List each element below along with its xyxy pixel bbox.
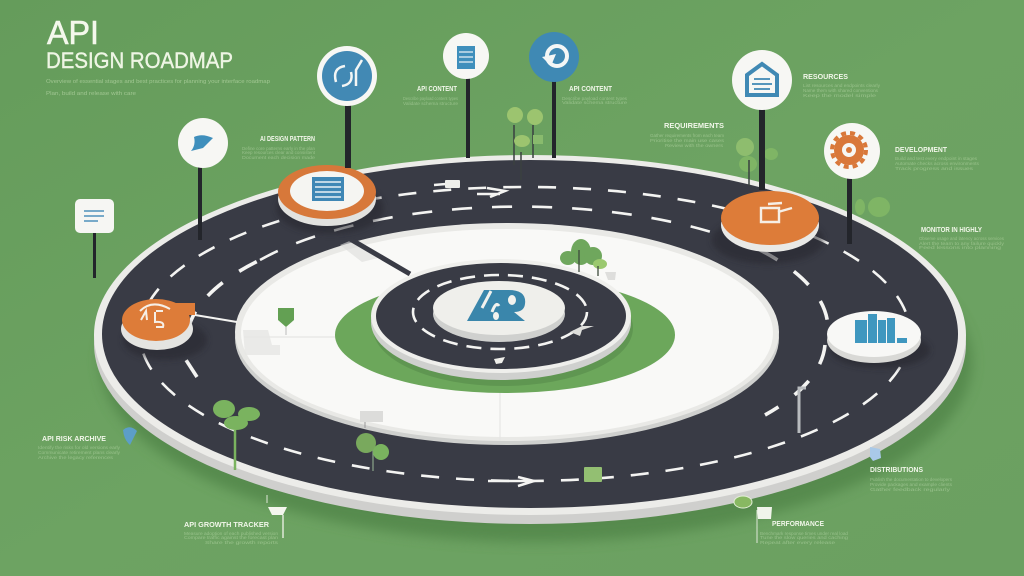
- label: design pattern: AI DESIGN PATTERN: [260, 136, 315, 143]
- label: bottom right: DISTRIBUTIONS: [870, 467, 923, 474]
- subtitle text: Plan, build and release with care: [46, 91, 136, 97]
- icon: hub road arrow: [570, 326, 594, 336]
- icon: city buildings: [855, 314, 907, 343]
- icon: dollar arrow: [140, 304, 170, 327]
- pin: target: [317, 46, 377, 168]
- label: api content left: [403, 86, 459, 106]
- inner lane markings: [186, 207, 828, 415]
- pin: calendar: [443, 33, 489, 158]
- label: bottom left: Identify the risks for old versions early: [38, 445, 121, 450]
- trees: top: [507, 107, 543, 180]
- trees: upper right: [736, 138, 778, 186]
- label: bottom centre left: Measure adoption of each published version: [184, 531, 279, 536]
- label: requirements: Prioritise the main use cases: [650, 138, 725, 143]
- connector road: [340, 236, 410, 274]
- ground marker: green oval: [734, 496, 752, 508]
- label: api content right: API CONTENT: [569, 86, 613, 93]
- label: bottom centre left: Share the growth reports: [205, 540, 279, 545]
- title: [46, 14, 233, 73]
- label: api content left: Describe payload content types: [403, 96, 459, 101]
- pin: house: [732, 50, 792, 190]
- sign: ring bottom: [360, 411, 383, 428]
- trees: right: [855, 197, 890, 217]
- subtitle text: [46, 79, 270, 97]
- label: design pattern: Define core patterns early in the plan: [242, 146, 315, 151]
- icon: orange box: [761, 203, 792, 222]
- pin: chat: [178, 118, 228, 240]
- platform: top right: [712, 191, 824, 264]
- label: requirements: Review with the owners: [665, 143, 724, 148]
- road arrow top: [434, 184, 505, 197]
- platform: left: [121, 299, 207, 360]
- tree: ring left: [278, 308, 294, 335]
- label: development: Track progress and issues: [895, 166, 974, 171]
- label: bottom centre right: Repeat after every release: [760, 540, 836, 545]
- label: bottom centre right: Tune the slow queries and caching: [760, 535, 849, 540]
- label: bottom right: Publish the documentation to developers: [870, 477, 953, 482]
- label: monitoring: Feed lessons into planning: [919, 245, 1002, 250]
- ground marker: white flag right: [757, 507, 772, 543]
- tree: road bottom: [356, 433, 389, 471]
- API logo: [467, 290, 525, 321]
- pin: refresh: [529, 32, 579, 158]
- label: resources: [803, 74, 881, 98]
- label: bottom centre left: Compare traffic against the forecast plan: [184, 535, 279, 540]
- label: monitoring: Observe usage and latency across services: [919, 236, 1005, 241]
- ground marker: blue left: [123, 427, 137, 445]
- tree: ring top: [560, 239, 616, 280]
- label: requirements: REQUIREMENTS: [664, 123, 724, 130]
- label: resources: Name them with shared conventions: [803, 88, 879, 93]
- pin: note: [75, 199, 114, 278]
- label: bottom centre right: Benchmark response times under real load: [760, 531, 849, 536]
- label: monitoring: Alert the team to any failure quickly: [919, 241, 1005, 246]
- label: development: Build and test every endpoint in stages: [895, 156, 978, 161]
- central hub: [371, 259, 633, 386]
- label: bottom centre right: PERFORMANCE: [772, 521, 824, 528]
- label: development: DEVELOPMENT: [895, 147, 948, 154]
- pin: gear: [824, 123, 880, 244]
- label: bottom right: [870, 467, 953, 492]
- green island: [335, 277, 675, 393]
- label: design pattern: [242, 136, 316, 160]
- label: api content right: Validate schema structure: [562, 100, 628, 105]
- ground marker: white flag left: [267, 495, 287, 538]
- icon: hub pin: [494, 357, 505, 364]
- label: bottom centre right: [760, 521, 849, 545]
- road arrow bottom: [488, 477, 534, 486]
- title: API: [47, 14, 99, 51]
- outer lane markings: [140, 187, 910, 481]
- platform: right: [827, 311, 930, 368]
- road sign top: [445, 180, 460, 188]
- street post: [799, 388, 806, 433]
- tree: road bottom left: [213, 400, 260, 470]
- label: monitoring: MONITOR IN HIGHLY: [921, 227, 982, 234]
- label: bottom centre left: API GROWTH TRACKER: [184, 522, 269, 529]
- label: requirements: Gather requirements from each team: [650, 133, 724, 138]
- label: bottom right: Provide packages and example clients: [870, 482, 953, 487]
- inner white ring: [235, 223, 779, 445]
- label: bottom centre left: [184, 522, 279, 545]
- title: DESIGN ROADMAP: [46, 48, 233, 73]
- platform: top left: [276, 165, 384, 234]
- label: api content left: API CONTENT: [417, 86, 458, 93]
- label: requirements: [650, 123, 725, 148]
- roundabout road: [94, 155, 972, 542]
- label: design pattern: Document each decision made: [242, 155, 316, 160]
- subtitle text: Overview of essential stages and best practices for planning your interface roadmap: [46, 79, 270, 85]
- label: resources: RESOURCES: [803, 74, 848, 81]
- label: bottom left: Communicate retirement plans clearly: [38, 450, 121, 455]
- label: api content left: Validate schema structure: [403, 101, 459, 106]
- connector left: [195, 315, 237, 322]
- label: api content right: [562, 86, 628, 105]
- label: development: Automate checks across environments: [895, 161, 980, 166]
- icon: document: [312, 177, 344, 201]
- label: design pattern: Keep resources clear and consistent: [242, 150, 316, 155]
- label: bottom left: [38, 436, 121, 460]
- label: bottom left: Archive the legacy references: [38, 455, 114, 460]
- label: bottom right: Gather feedback regularly: [870, 487, 951, 492]
- ground marker: blue cube: [870, 447, 881, 461]
- label: resources: List resources and endpoints clearly: [803, 83, 881, 88]
- label: bottom left: API RISK ARCHIVE: [42, 436, 106, 443]
- label: monitoring: [919, 227, 1005, 250]
- ground marker: green card: [584, 467, 602, 482]
- label: api content right: Describe payload content types: [562, 96, 628, 101]
- label: resources: Keep the model simple: [803, 93, 877, 98]
- label: development: [895, 147, 980, 171]
